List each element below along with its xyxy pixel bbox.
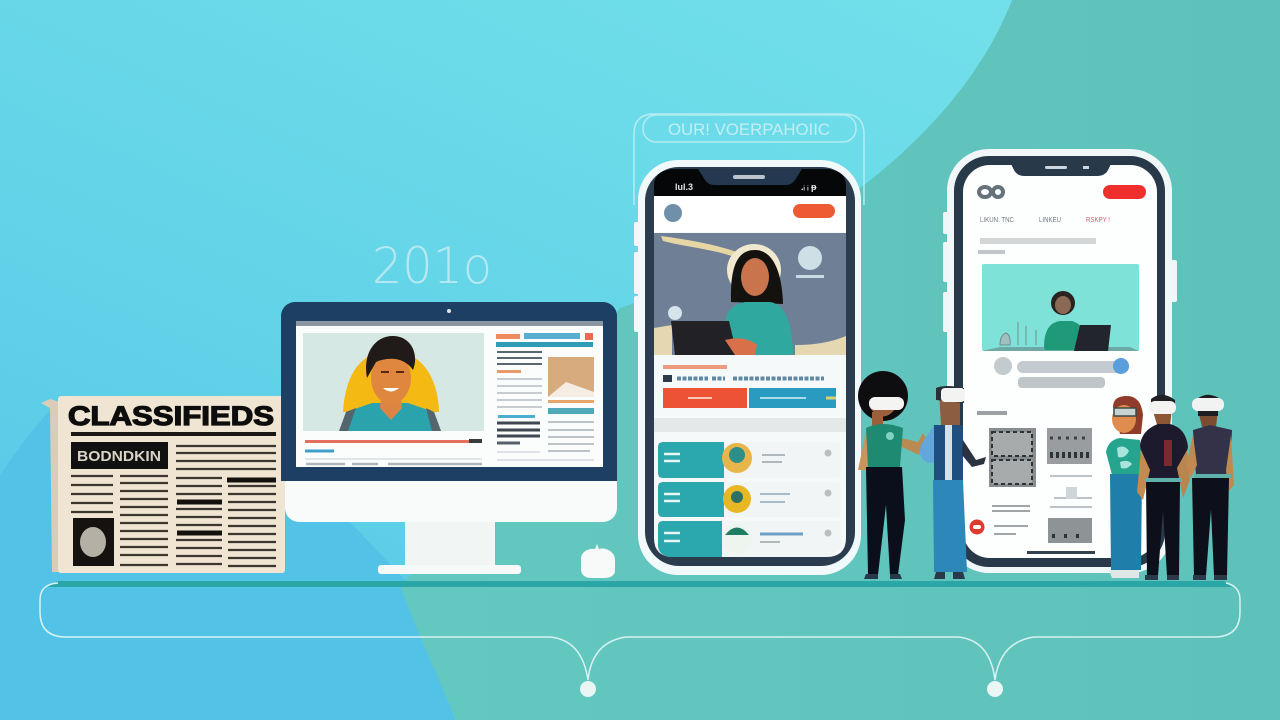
caption lines — [305, 450, 334, 452]
gallery captions — [992, 476, 1092, 534]
person: afro hair with VR headset — [858, 371, 926, 579]
red sign-in button — [1103, 185, 1146, 199]
timeline node left — [580, 681, 596, 697]
phone hero illustration — [654, 233, 846, 355]
floating red chat button — [970, 520, 984, 534]
smartphone two — [943, 149, 1177, 573]
video illustration — [982, 264, 1139, 351]
callout frame above phone — [634, 114, 864, 205]
phone content and action buttons — [663, 365, 836, 408]
desktop monitor — [281, 302, 617, 574]
monitor screen — [296, 321, 603, 467]
video progress bar — [305, 439, 482, 443]
newspaper bold bars — [177, 480, 276, 533]
timeline bracket — [40, 583, 1240, 680]
phone screen — [654, 196, 846, 557]
person: dark shirt with VR headset — [1137, 395, 1190, 580]
newspaper subhead box — [71, 442, 168, 469]
newspaper: classifieds — [41, 396, 285, 573]
gallery label — [977, 411, 1007, 415]
nav labels: RSKPY ! — [1086, 217, 1110, 224]
newspaper subhead box: BODNDKIN — [77, 448, 161, 465]
comment pills — [994, 357, 1129, 388]
search bar — [980, 238, 1096, 244]
list row three — [658, 521, 841, 557]
year label: 201o — [372, 237, 492, 295]
app logo — [979, 187, 1003, 197]
article sidebar — [496, 333, 594, 460]
list row two — [658, 482, 841, 517]
blue button — [749, 388, 836, 408]
person: green shirt and goggles — [1106, 396, 1143, 578]
list row one — [658, 442, 841, 478]
monitor stand — [378, 520, 521, 574]
person: blue coat with VR headset — [920, 386, 986, 579]
home indicator — [1027, 551, 1095, 554]
timeline bar — [48, 581, 1232, 587]
small white device — [581, 544, 615, 578]
nav labels: LIKUN. TNC — [980, 217, 1014, 224]
newspaper text columns — [71, 446, 276, 566]
section label — [978, 250, 1005, 254]
nav labels — [980, 217, 1110, 224]
nav labels: LINKEU — [1039, 217, 1061, 224]
background: teal wave — [400, 0, 1280, 720]
person: navy shirt with VR headset — [1186, 395, 1234, 580]
timeline node right — [987, 681, 1003, 697]
gallery photos — [989, 428, 1092, 543]
background: darker blue lower-left wave — [0, 398, 455, 720]
video panel with portrait — [303, 333, 484, 431]
smartphone one — [634, 160, 861, 575]
phone status bar: lul.3 — [675, 182, 693, 192]
red button — [663, 388, 747, 408]
phone header — [654, 196, 846, 232]
smartphone one: .ᵢ ᵢ ᵽ — [801, 182, 817, 192]
newspaper headline: CLASSIFIEDS — [68, 401, 274, 431]
newspaper photo — [73, 518, 114, 566]
callout label: OUR! VOERPAHOIIC — [668, 120, 830, 139]
